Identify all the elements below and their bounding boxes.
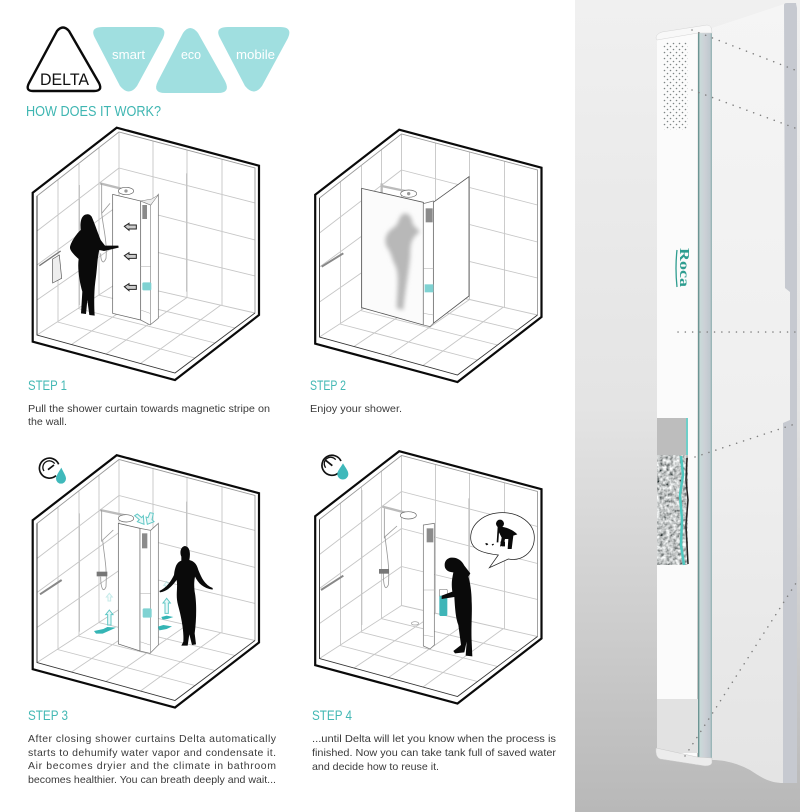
text block: step 2 [310,378,402,415]
dotted lines [678,30,798,756]
blurred figure [385,213,420,310]
logo: Delta triangle: DELTA [40,71,89,89]
delta column [141,194,158,325]
badge: eco [156,28,227,93]
curtains [362,177,469,325]
side strip [783,3,797,783]
text block: step 3: STEP 3 [28,708,68,723]
text block: step 3: starts to dehumify water vapor and condensate it. [28,747,276,759]
badge: smart [93,27,164,92]
top cap [656,25,712,40]
text block: step 2: Enjoy your shower. [310,403,402,415]
badge: smart: smart [112,48,146,62]
illustration: step 2 room [315,130,542,382]
delta column body [657,32,697,765]
bottom cap [656,748,712,766]
water puddles [94,616,173,634]
curtain [118,523,140,651]
bottom grille [657,699,698,753]
text block: step 3: becomes healthier. You can breath deeply and wait... [28,774,276,786]
towel rail [39,251,62,283]
tank bottle [439,589,447,616]
text block: step 4: ...until Delta will let you know when the process is [312,733,556,745]
delta column [140,523,158,653]
logo: Roca: Roca [676,248,691,287]
badge: mobile: mobile [236,48,275,62]
woman silhouette [442,558,472,656]
towel rail [322,253,343,267]
icon: gauge and drop [39,458,66,484]
text block: step 2: STEP 2 [310,378,346,393]
illustration: step 4 room [315,451,542,704]
text block: step 3 [28,708,277,786]
text block: step 4: finished. Now you can take tank full of saved water [312,747,557,759]
text block: step 4: STEP 4 [312,708,352,723]
woman silhouette [159,546,213,646]
text block: step 4: and decide how to reuse it. [312,761,439,773]
text block: step 1: STEP 1 [28,378,67,393]
perforated grille [663,42,688,130]
woman silhouette [70,214,119,316]
delta column [423,201,433,327]
badge: eco: eco [181,48,201,62]
heading: how does it work: HOW DOES IT WORK? [26,104,161,120]
text block: step 1: Pull the shower curtain towards magnetic stripe on [28,403,270,415]
glass strip [698,33,712,761]
text block: step 1: the wall. [28,416,67,428]
text block: step 3: After closing shower curtains Delta automatically [28,733,277,745]
panel: product photo [575,0,800,812]
text block: step 1 [28,378,270,428]
arrows [124,223,136,291]
illustration: step 3 room [33,455,259,708]
badge: mobile [218,27,289,92]
logo: Delta triangle [28,28,100,91]
text block: step 4 [312,708,557,773]
water tank window [657,418,688,565]
speech bubble [471,513,534,568]
panel: white background [0,0,575,812]
curtain [113,194,141,320]
illustration: step 1 room [33,128,259,380]
delta column [423,523,434,649]
text block: step 3: Air becomes dryier and the climate in bathroom [28,760,276,772]
airflow arrows [106,513,170,625]
icon: gauge and drop [322,455,348,479]
curtain sheet [712,4,797,783]
